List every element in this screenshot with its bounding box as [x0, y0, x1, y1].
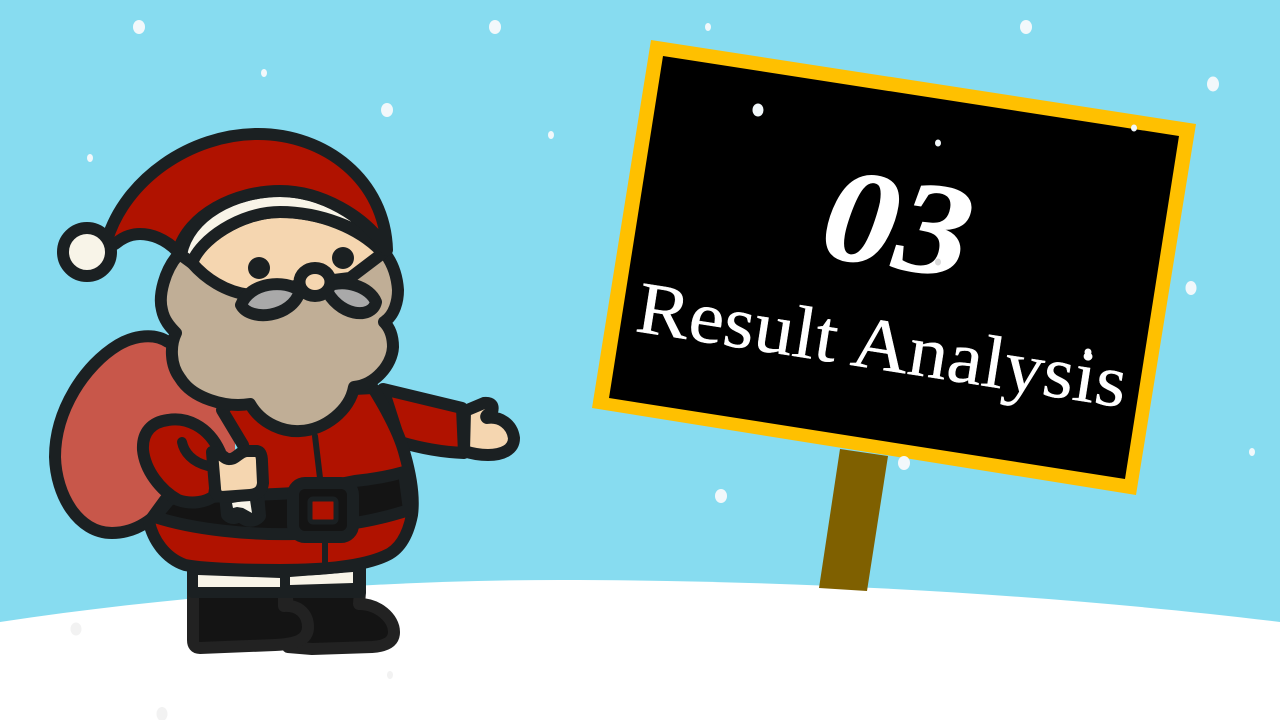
gift sack fill [55, 336, 235, 533]
coat centre seam [315, 436, 325, 564]
left eye [248, 257, 270, 279]
beard [161, 252, 398, 431]
right hand [464, 403, 514, 455]
section title: Result Analysis [631, 266, 1133, 424]
belt buckle [293, 483, 353, 537]
right arm [383, 389, 464, 453]
sign frame [592, 40, 1196, 495]
right eye [332, 247, 354, 269]
hat brim [181, 191, 385, 263]
gift sack outline [55, 336, 172, 533]
signpost [819, 449, 888, 591]
sleeve curl [182, 442, 208, 466]
face [192, 212, 383, 295]
rolled sleeve [143, 419, 220, 503]
cuff highlight [232, 500, 252, 513]
hat pompom [63, 228, 111, 276]
section number: 03 [813, 140, 982, 307]
belt [155, 472, 409, 534]
sign panel [609, 56, 1179, 479]
right moustache [325, 283, 376, 313]
buckle centre [310, 499, 336, 522]
mitten cuff [225, 492, 260, 521]
left cuff [198, 575, 280, 587]
boots [193, 592, 394, 649]
santa character [55, 134, 514, 649]
hat [107, 134, 387, 252]
snowy ground [0, 580, 1280, 720]
right cuff [290, 572, 353, 585]
buckle frame [293, 483, 353, 537]
coat [149, 388, 413, 570]
trouser cuffs [193, 568, 360, 592]
right boot [287, 592, 394, 649]
nose [300, 268, 330, 296]
left moustache [241, 284, 300, 315]
left hand [212, 451, 263, 497]
trouser backing [193, 568, 360, 592]
sign board [592, 40, 1196, 495]
left boot [193, 592, 308, 648]
